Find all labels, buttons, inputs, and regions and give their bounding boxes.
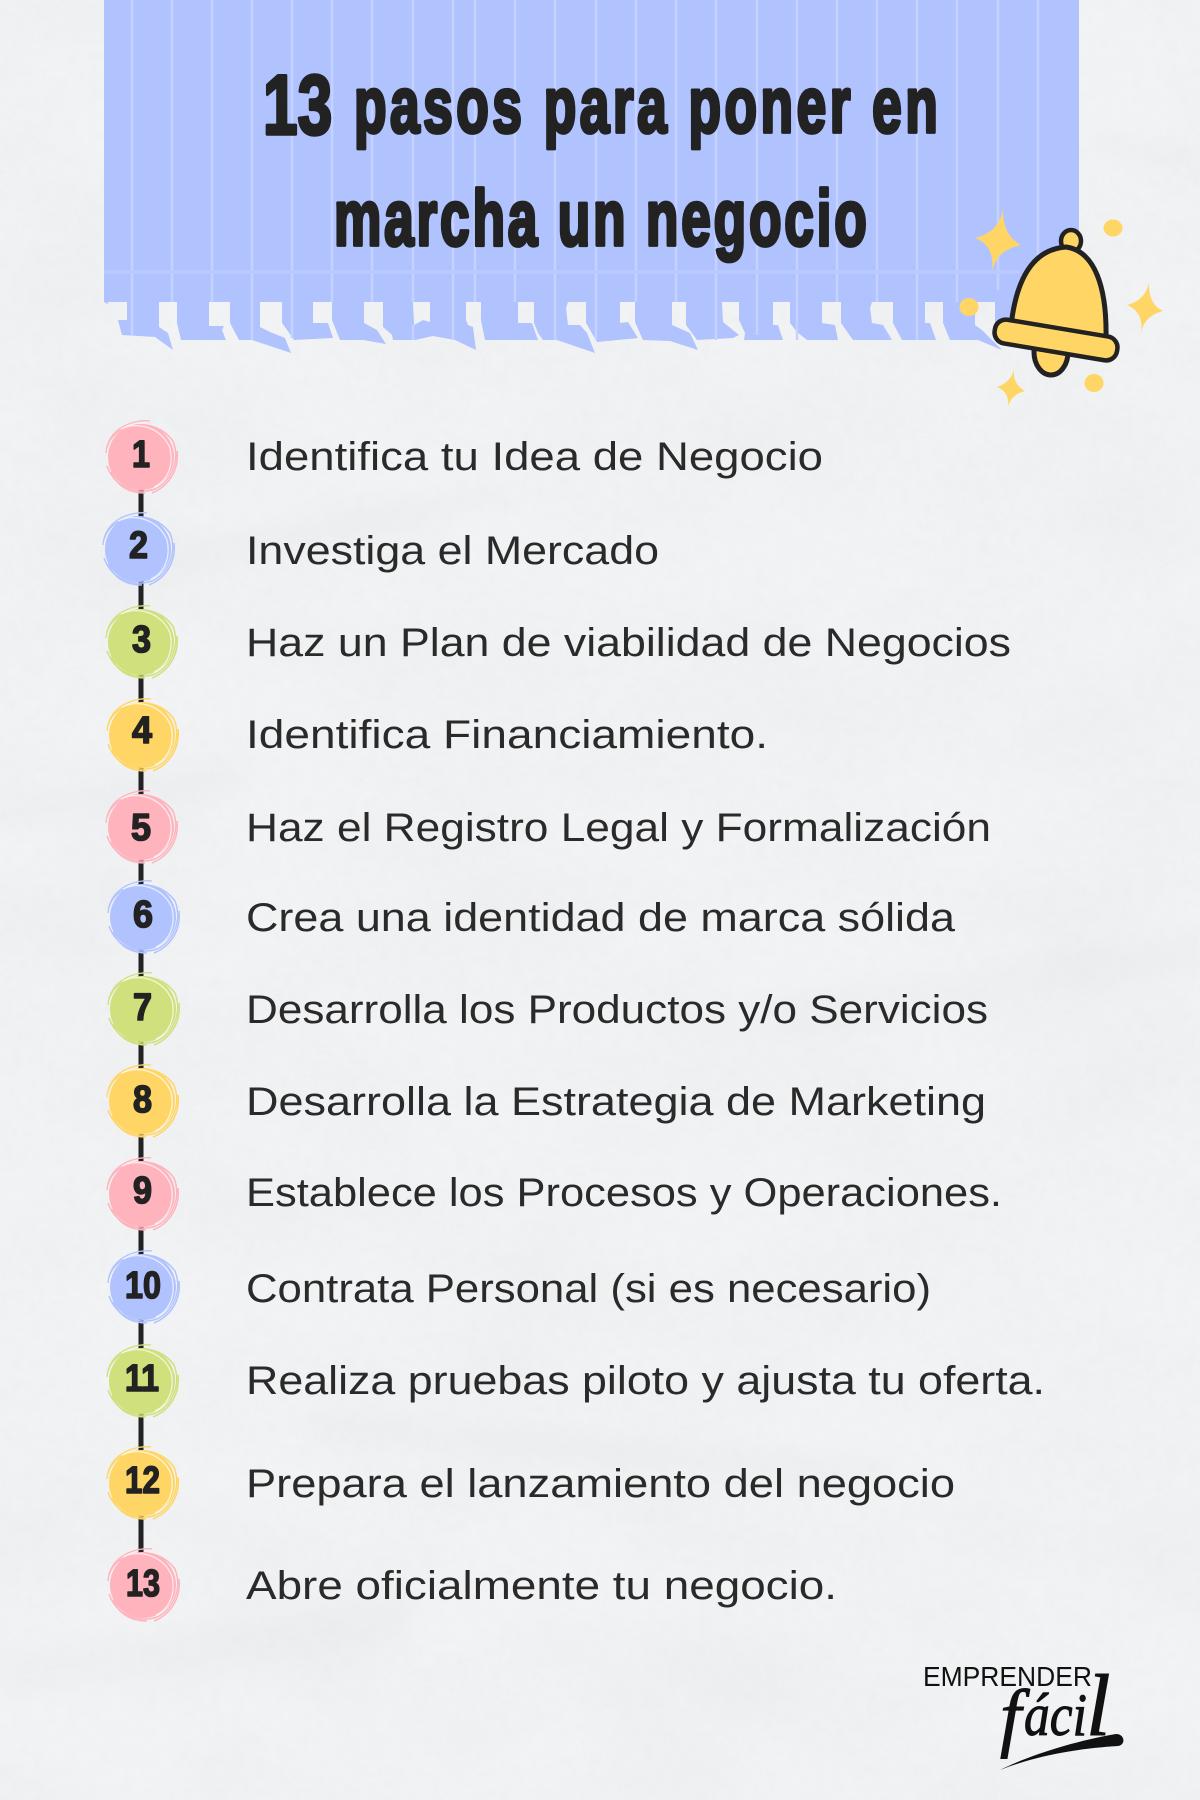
step 4: Identifica Financiamiento.: [246, 713, 768, 757]
step 6: Crea una identidad de marca sólida: [246, 896, 956, 940]
logo: Emprender Fácil: áci: [1024, 1682, 1087, 1748]
step 8: 8: [133, 1079, 152, 1121]
step 12: [107, 1447, 955, 1519]
step 10: Contrata Personal (si es necesario): [246, 1267, 931, 1311]
step 2: Investiga el Mercado: [246, 529, 659, 573]
step 3: 3: [132, 619, 151, 661]
step 7: Desarrolla los Productos y/o Servicios: [246, 988, 988, 1032]
step 1: 1: [132, 434, 150, 476]
step 11: [107, 1345, 1045, 1417]
step 4: 4: [132, 710, 152, 752]
step 5: 5: [131, 807, 151, 849]
step 8: [107, 1065, 986, 1137]
step 7: 7: [133, 987, 152, 1029]
step 6: [108, 881, 956, 953]
step 6: 6: [133, 894, 153, 936]
step 10: [108, 1251, 931, 1323]
logo: Emprender Fácil: f: [1000, 1675, 1030, 1759]
step 12: 12: [125, 1460, 160, 1502]
step 5: Haz el Registro Legal y Formalización: [246, 806, 991, 850]
step 1: Identifica tu Idea de Negocio: [246, 435, 823, 479]
step 7: [108, 973, 988, 1045]
step 9: 9: [133, 1170, 152, 1212]
title: pasos para poner en: [354, 62, 938, 150]
logo: Emprender Fácil: EMPRENDER: [923, 1661, 1092, 1692]
title: 13: [263, 58, 332, 152]
step 3: Haz un Plan de viabilidad de Negocios: [246, 621, 1011, 665]
step 5: [106, 791, 991, 863]
banner: torn blue paper: [104, 0, 1079, 353]
step 1: [106, 421, 823, 493]
step 9: Establece los Procesos y Operaciones.: [246, 1171, 1002, 1215]
logo: Emprender Fácil: [923, 1658, 1123, 1770]
logo: Emprender Fácil: l: [1086, 1658, 1110, 1755]
step 13: 13: [126, 1563, 160, 1605]
step 12: Prepara el lanzamiento del negocio: [246, 1462, 955, 1506]
title: [263, 58, 938, 263]
icon: bell with sparkles: [960, 208, 1163, 408]
step 9: [107, 1158, 1002, 1230]
step 2: 2: [129, 525, 148, 567]
step 8: Desarrolla la Estrategia de Marketing: [246, 1080, 986, 1124]
step 11: Realiza pruebas piloto y ajusta tu oferta.: [246, 1359, 1045, 1403]
step 13: [108, 1549, 837, 1621]
title: marcha un negocio: [334, 175, 867, 263]
step 2: [103, 513, 659, 585]
step 10: 10: [125, 1265, 161, 1307]
step 4: [107, 699, 768, 771]
step 11: 11: [125, 1358, 159, 1400]
timeline connector: [138, 456, 144, 1586]
step 13: Abre oficialmente tu negocio.: [246, 1564, 837, 1608]
step 3: [106, 606, 1011, 678]
